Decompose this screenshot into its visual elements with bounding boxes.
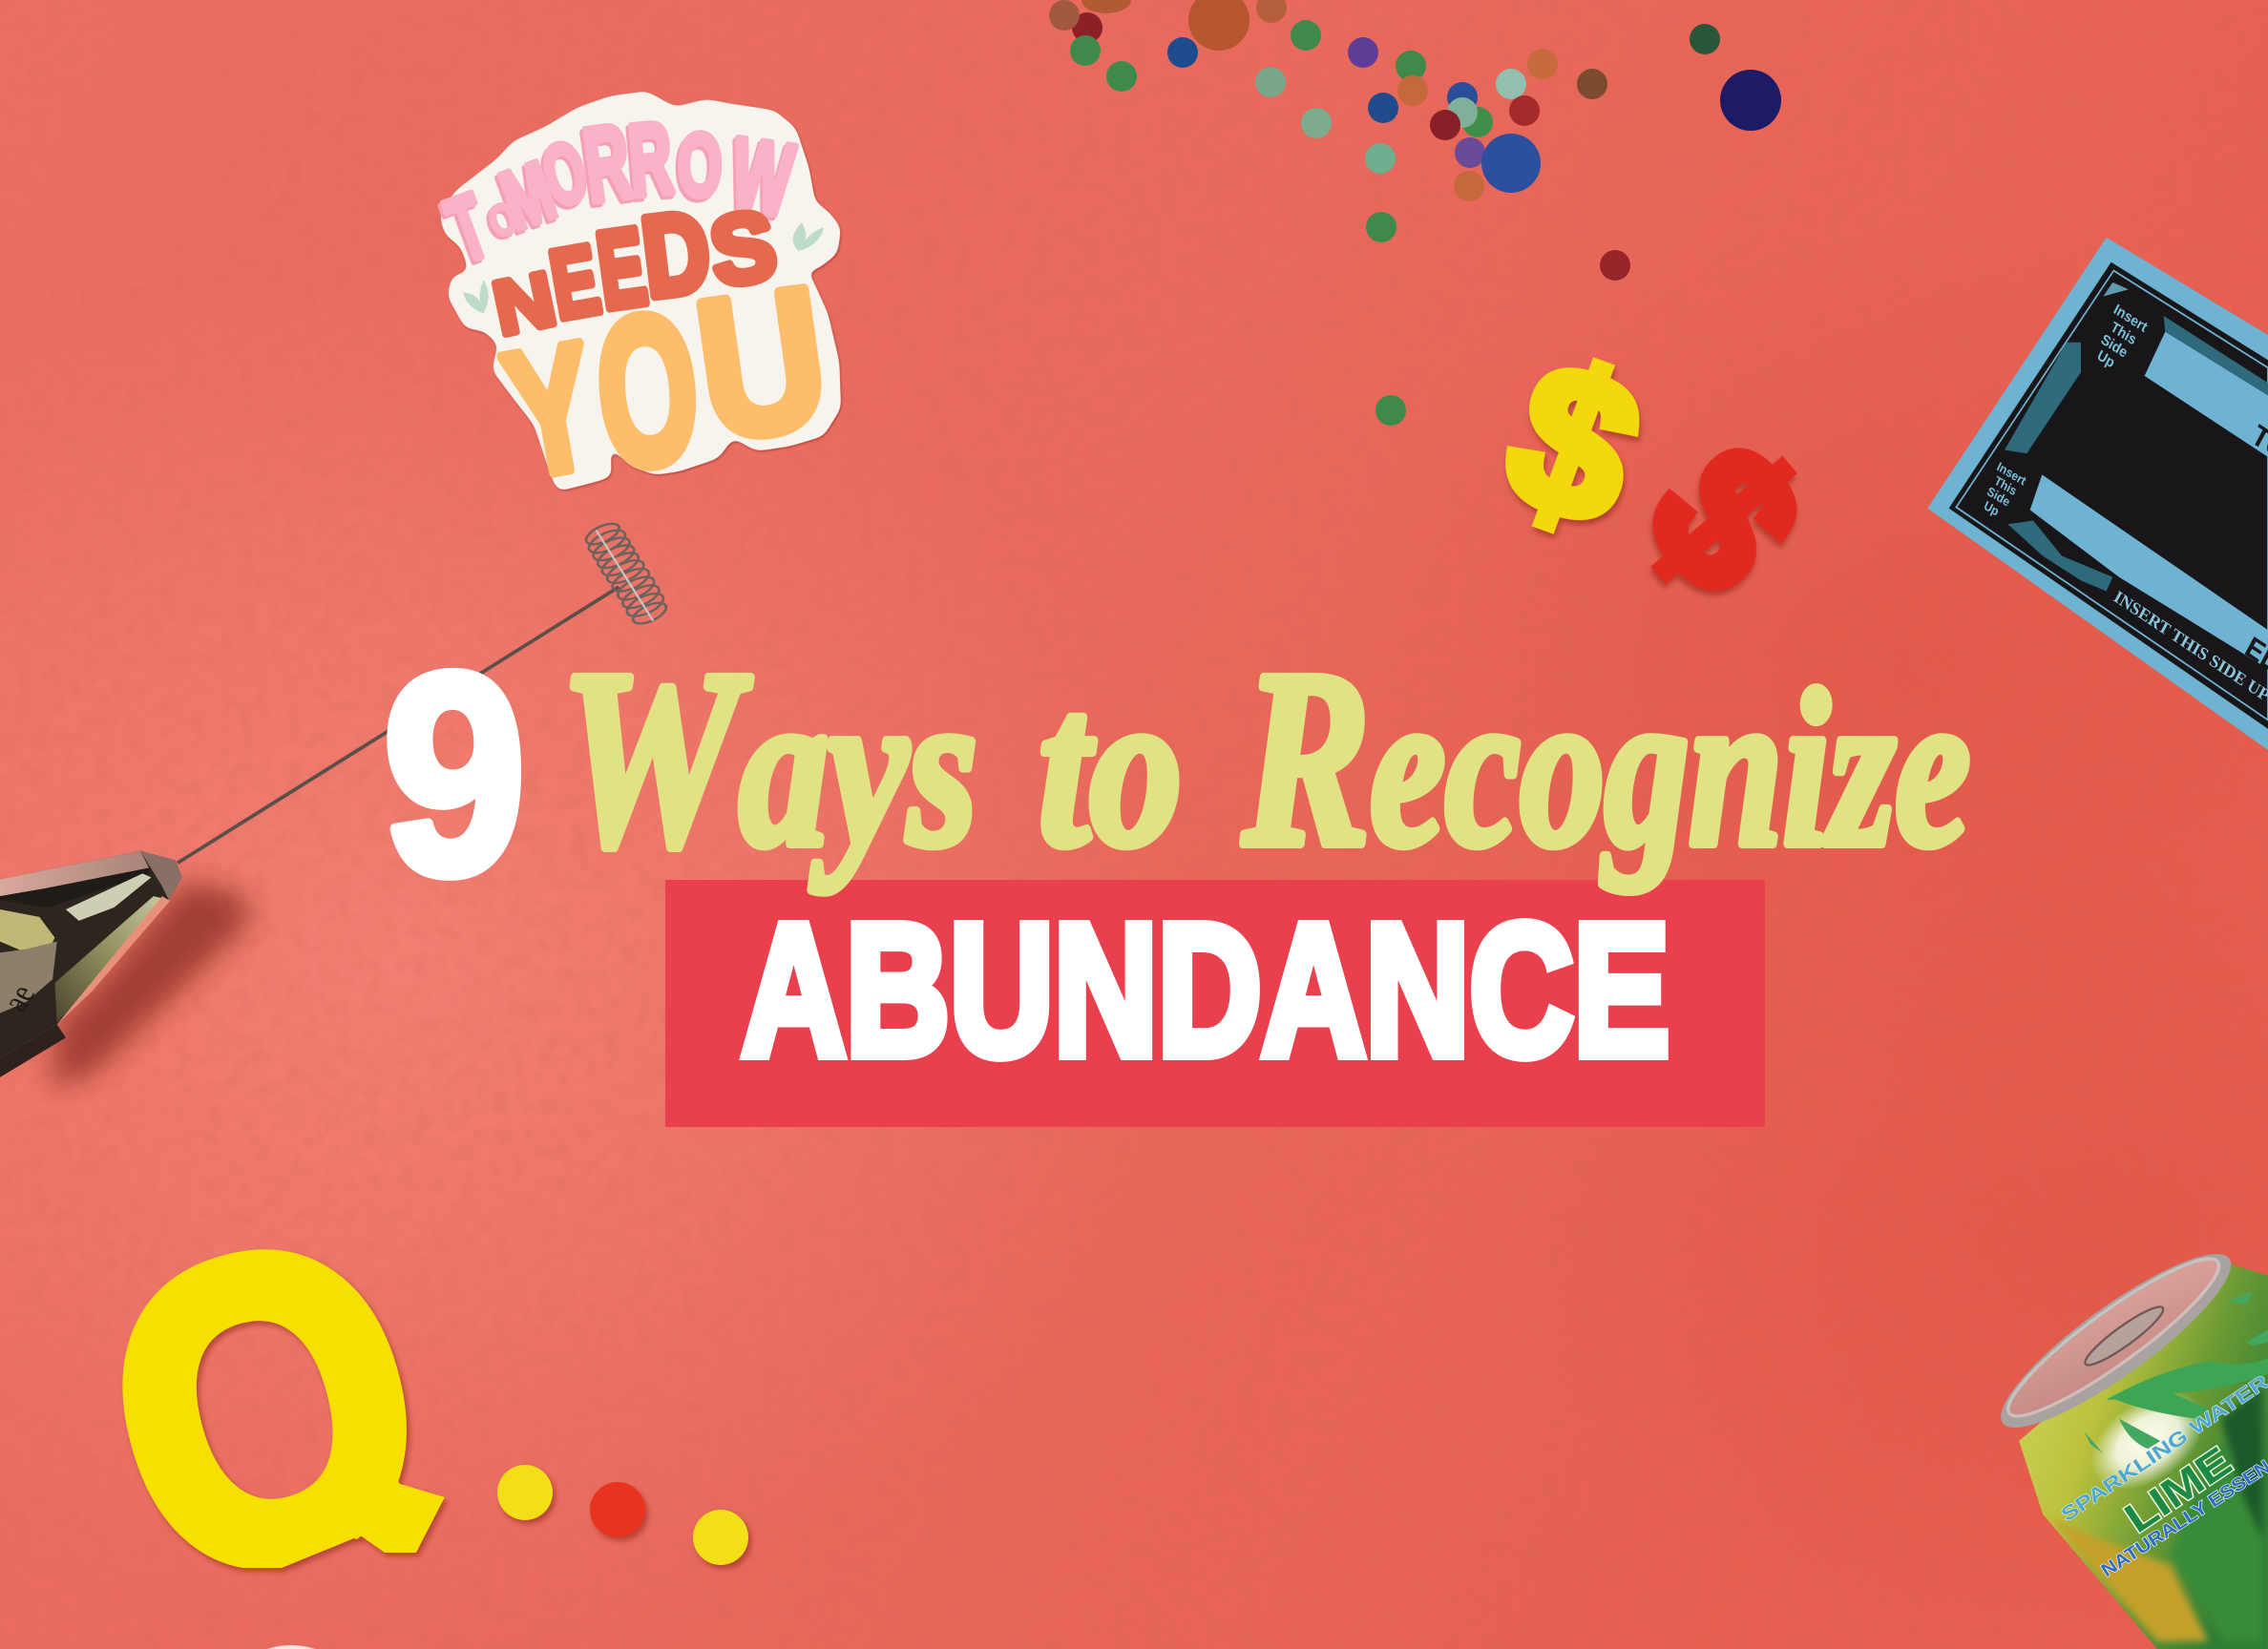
sticker word: tomorrow: O xyxy=(533,121,598,225)
ticket small print: This xyxy=(2108,320,2139,348)
ticket cut-off words xyxy=(2240,419,2268,678)
title script line: Recognize xyxy=(1240,617,1970,899)
can label xyxy=(2057,1371,2268,1581)
can label: LIME xyxy=(2117,1438,2240,1542)
title script line xyxy=(559,617,1970,899)
sticker leaves xyxy=(463,222,824,313)
ticket small print: Up xyxy=(1982,498,2002,519)
sticker word: tomorrow: O xyxy=(482,191,524,247)
title script line: to xyxy=(1039,644,1182,892)
ticket small print xyxy=(1982,302,2150,519)
sticker word: you: Y xyxy=(492,305,610,516)
ticket footer print: INSERT THIS SIDE UP xyxy=(2110,586,2268,705)
ticket small print: Side xyxy=(2098,332,2130,362)
can label: NATURALLY ESSEN xyxy=(2098,1457,2268,1581)
sticker backing xyxy=(444,95,837,487)
dollar sign: yellow: $ xyxy=(1480,316,1667,571)
milk frother xyxy=(0,519,670,1089)
sticker word: tomorrow: M xyxy=(490,143,566,247)
can pull tab xyxy=(2080,1300,2169,1371)
sparkling water can xyxy=(2001,1254,2268,1649)
ticket small print: Insert xyxy=(1995,460,2028,489)
sticker word: tomorrow xyxy=(434,100,800,282)
small white object at bottom edge xyxy=(267,1645,315,1649)
title script line: Ways xyxy=(559,617,977,899)
sticker word: needs xyxy=(486,187,782,351)
ticket: blue insert slip xyxy=(1927,238,2268,750)
ticket small print: Side xyxy=(1984,485,2012,510)
confetti scatter xyxy=(1049,0,1781,426)
frother metal handle xyxy=(0,851,182,1077)
title numeral 9: 9 xyxy=(383,616,526,933)
sticker word: tomorrow: R xyxy=(578,102,638,225)
sticker word: you: U xyxy=(685,247,839,482)
dollar sign: red: $ xyxy=(1606,407,1844,631)
ticket small print: Up xyxy=(2094,347,2117,371)
ticket small print: This xyxy=(1992,473,2019,498)
title banner xyxy=(665,880,1765,1127)
sticker word: needs: S xyxy=(704,191,782,307)
sticker word: needs: N xyxy=(486,256,562,351)
sticker word: tomorrow: R xyxy=(624,100,677,218)
ticket small print: Insert xyxy=(2110,302,2150,336)
sticker word: needs: D xyxy=(636,187,716,321)
can label: SPARKLING WATER xyxy=(2057,1371,2268,1526)
sticker word: you: O xyxy=(588,269,707,511)
frother coil head xyxy=(582,519,670,628)
sticker word: tomorrow: T xyxy=(434,174,501,282)
sticker word: you xyxy=(492,247,839,516)
frother shaft xyxy=(178,587,619,863)
sticker word: tomorrow: O xyxy=(678,115,723,215)
title word abundance: ABUNDANCE xyxy=(742,886,1670,1095)
frother shadow xyxy=(52,881,250,1089)
dots trailing the Q xyxy=(497,1465,748,1565)
sticker word: needs: E xyxy=(591,206,653,332)
can body xyxy=(2019,1263,2268,1649)
can lid xyxy=(1983,1231,2249,1451)
sticker: tomorrow needs you xyxy=(434,95,839,516)
sticker word: needs: E xyxy=(543,224,607,340)
sticker word: tomorrow: W xyxy=(724,115,800,238)
